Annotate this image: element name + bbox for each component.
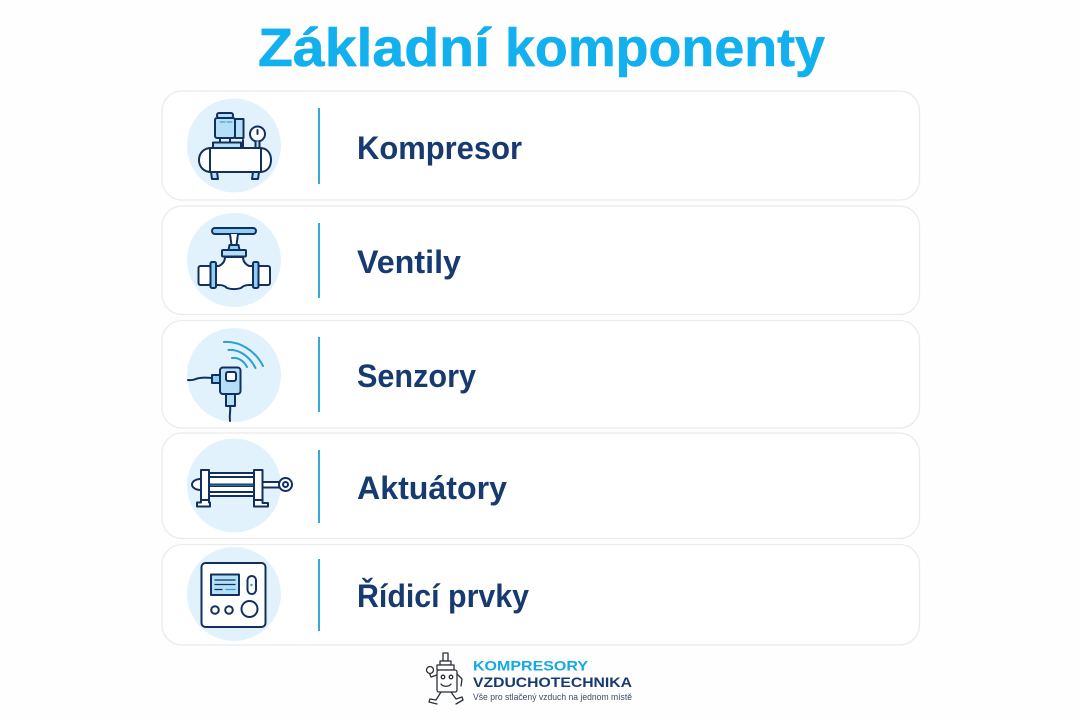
label: Senzory bbox=[357, 358, 476, 394]
label: Kompresor bbox=[357, 130, 522, 166]
title bbox=[258, 18, 825, 78]
panel: Řídicí prvky bbox=[162, 544, 920, 645]
label: Řídicí prvky bbox=[357, 578, 529, 614]
panel: Aktuátory bbox=[162, 433, 920, 538]
icon: compressor bbox=[187, 98, 281, 192]
title: komponenty bbox=[505, 18, 825, 78]
brand name top: KOMPRESORY bbox=[473, 658, 589, 674]
icon: sensor bbox=[187, 328, 281, 422]
panel: Ventily bbox=[162, 206, 920, 314]
label: Aktuátory bbox=[357, 470, 507, 506]
icon: mascot bbox=[426, 653, 463, 704]
divider bbox=[318, 450, 320, 523]
title: Základní bbox=[258, 18, 492, 78]
icon: control panel bbox=[187, 547, 281, 641]
divider bbox=[318, 223, 320, 298]
label: Ventily bbox=[357, 244, 461, 280]
panel: Senzory bbox=[162, 320, 920, 428]
divider bbox=[318, 337, 320, 412]
tagline: Vše pro stlačený vzduch na jednom místě bbox=[473, 692, 632, 702]
icon: valve bbox=[187, 213, 281, 307]
panel: Kompresor bbox=[162, 91, 920, 200]
brand name bottom: VZDUCHOTECHNIKA bbox=[473, 674, 632, 690]
footer logo bbox=[426, 653, 632, 704]
divider bbox=[318, 559, 320, 631]
icon: actuator bbox=[187, 438, 292, 532]
divider bbox=[318, 108, 320, 184]
